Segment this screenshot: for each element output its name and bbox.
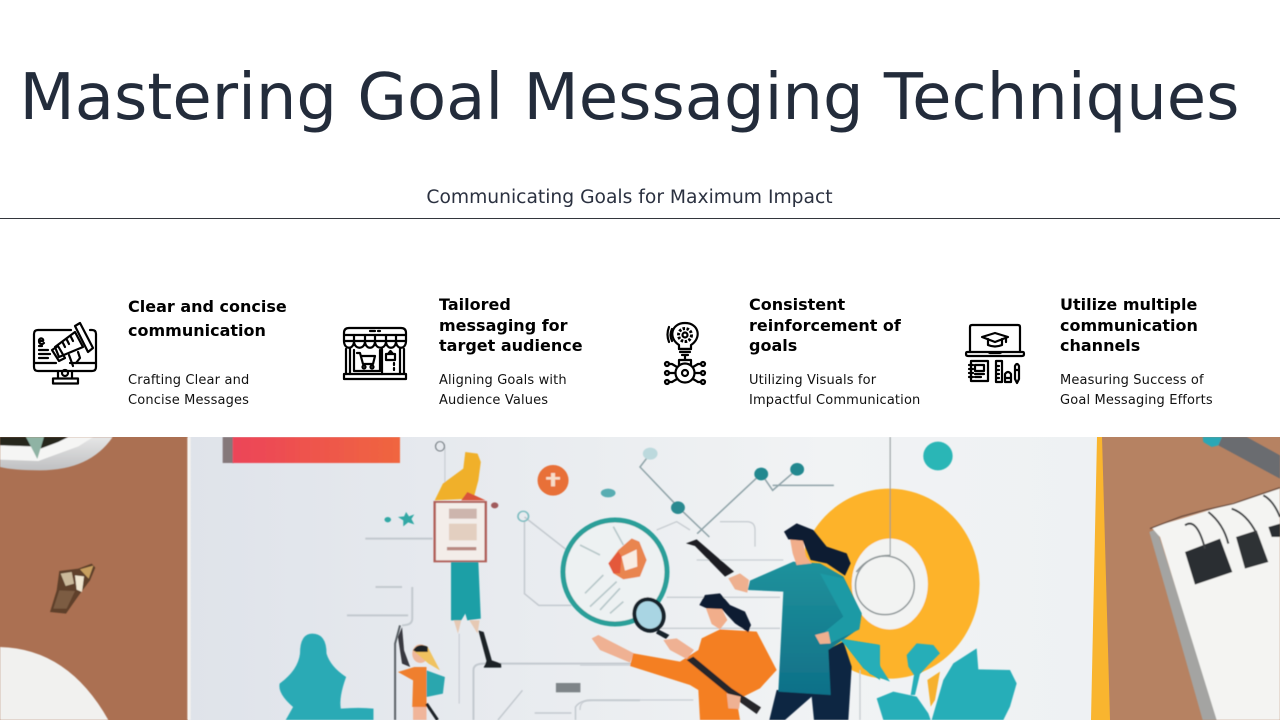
heading: consistent reinforcement [749, 295, 901, 355]
donut hole detail [856, 437, 914, 615]
lower right plant [840, 640, 1017, 720]
background lines [580, 522, 860, 720]
marker pen [1203, 437, 1280, 479]
paper edge highlight [187, 437, 191, 720]
woman in orange [592, 593, 777, 720]
round leaf [907, 643, 940, 695]
spiral notebook [1149, 488, 1280, 720]
heading: utilize multiple channels [1060, 295, 1198, 355]
illustration left [233, 437, 640, 720]
desk objects right [1149, 437, 1280, 720]
heading: clear and concise [128, 297, 287, 340]
magnifying glass [629, 594, 669, 639]
heading: tailored messaging [439, 295, 583, 355]
orange badge [538, 465, 569, 496]
heading: utilize multiple channels: communication [1060, 316, 1198, 334]
gold clip [50, 564, 95, 614]
icon: laptop with graduation cap and stationery [964, 324, 1026, 384]
heading: utilize multiple channels: channels [1060, 336, 1140, 355]
heading: tailored messaging: Tailored [439, 295, 511, 314]
yellow donut [798, 489, 980, 679]
icon: monitor with megaphone [32, 322, 98, 385]
paper sheet [188, 437, 1098, 720]
chart nodes [643, 442, 953, 514]
yellow figure [435, 452, 486, 500]
red note shadow [223, 437, 233, 463]
heading: clear and concise: Clear and concise [128, 297, 287, 316]
description: aligning goals: Audience Values [439, 393, 548, 408]
trousers [769, 642, 852, 720]
description: utilizing visuals [749, 373, 920, 408]
heading: consistent reinforcement: goals [749, 336, 797, 355]
description: utilizing visuals: Impactful Communication [749, 393, 920, 408]
hair [699, 593, 751, 632]
description: measuring success: Goal Messaging Efforts [1060, 393, 1213, 408]
heading: clear and concise: communication [128, 321, 266, 340]
accents [384, 489, 616, 526]
grey smudge [556, 683, 580, 692]
chart lines [640, 454, 834, 537]
lower hand [727, 693, 741, 709]
document panel [435, 502, 486, 561]
figures group [563, 520, 880, 720]
description: crafting clear [128, 373, 249, 408]
icon: storefront with cart [342, 326, 408, 380]
heading: consistent reinforcement: Consistent [749, 295, 845, 314]
description: utilizing visuals: Utilizing Visuals for [749, 373, 876, 388]
tunic [748, 562, 862, 695]
icon: light bulb and gear network [664, 322, 706, 386]
plant pot [0, 437, 113, 470]
heading: tailored messaging: target audience [439, 336, 583, 355]
sleeve [820, 573, 862, 643]
red note [233, 437, 400, 463]
heading: consistent reinforcement: reinforcement of [749, 316, 901, 334]
yellow paper edge [1091, 437, 1110, 720]
item: consistent reinforcement [749, 295, 920, 408]
scarf leaf [840, 638, 880, 680]
description: aligning goals [439, 373, 567, 408]
chart and donut [640, 437, 980, 679]
hip hand [815, 632, 831, 644]
item: utilize multiple channels [1060, 295, 1213, 408]
magnifier ring [563, 520, 667, 624]
woman in teal [728, 523, 880, 720]
desk background [0, 437, 1280, 720]
description: crafting clear: Crafting Clear and [128, 373, 249, 388]
white plate [0, 647, 108, 720]
magnifier handle stick [687, 657, 761, 714]
body [630, 629, 777, 720]
item: clear and concise communication [128, 297, 287, 408]
title: Mastering Goal Messaging Techniques [20, 61, 1240, 135]
description: measuring success: Measuring Success of [1060, 373, 1204, 388]
heading: tailored messaging: messaging for [439, 316, 568, 334]
yellow stem [927, 672, 940, 707]
description: measuring success [1060, 373, 1213, 408]
description: crafting clear: Concise Messages [128, 393, 249, 408]
subtitle: Communicating Goals for Maximum Impact [426, 187, 833, 208]
face [790, 538, 812, 565]
small climber figure [395, 625, 445, 720]
donut hole fill [852, 539, 928, 629]
large leaf [932, 648, 1017, 720]
face [706, 608, 727, 629]
hand far [592, 635, 634, 663]
lower leaf [877, 692, 931, 720]
hand [728, 573, 749, 593]
scarf leaf [840, 640, 890, 682]
desk objects left [0, 437, 233, 720]
figure legs [451, 562, 501, 668]
pointer stick [686, 539, 734, 577]
teal plant [279, 634, 373, 720]
near hand [663, 638, 694, 659]
description: aligning goals: Aligning Goals with [439, 373, 567, 388]
hair [784, 523, 851, 576]
item: tailored messaging [439, 295, 583, 408]
pale grey connector lines [347, 447, 640, 720]
hero image: desk illustration [0, 437, 1280, 720]
top ring node [436, 442, 444, 451]
heading: utilize multiple channels: Utilize multiple [1060, 295, 1197, 314]
